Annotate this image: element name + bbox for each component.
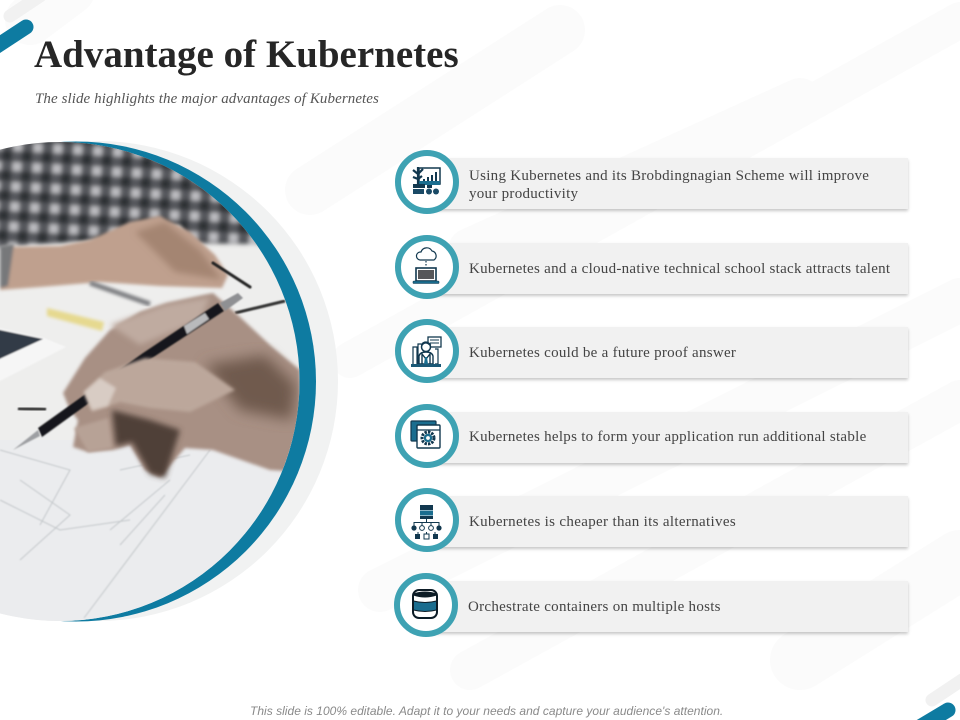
icon: cloud and laptop	[412, 247, 440, 284]
item 6: containers	[394, 573, 910, 637]
corner accent: top left	[0, 20, 34, 53]
item 3 text: Kubernetes could be a future proof answer	[469, 345, 736, 361]
item 4: stability	[395, 404, 910, 468]
icon: browser windows with gear	[410, 420, 441, 449]
subtitle: The slide highlights the major advantages of Kubernetes	[35, 91, 379, 107]
pen	[13, 293, 243, 450]
tablet	[0, 329, 62, 380]
icon: database cylinder	[412, 589, 438, 619]
icon: server network hierarchy	[411, 505, 442, 540]
item 5 text: Kubernetes is cheaper than its alternatives	[469, 514, 736, 530]
icon: person with speech bubble	[411, 336, 442, 367]
item 1: productivity	[395, 150, 910, 214]
item 2 text: Kubernetes and a cloud-native technical school stack attracts talent	[469, 261, 890, 277]
corner accent: bottom right	[916, 702, 956, 720]
lower hand	[63, 293, 300, 477]
footer note: This slide is 100% editable. Adapt it to your needs and capture your audience's attention.	[250, 704, 723, 718]
blueprint lines	[0, 450, 210, 618]
item 1 text	[469, 168, 869, 202]
thumb	[84, 358, 235, 412]
circular photo: hands drawing on blueprints	[0, 141, 338, 622]
item 3: future proof	[395, 319, 910, 383]
upper hand	[0, 216, 228, 290]
item 6 text: Orchestrate containers on multiple hosts	[468, 599, 721, 615]
shirt	[0, 142, 258, 250]
title: Advantage of Kubernetes	[34, 33, 459, 76]
item 4 text: Kubernetes helps to form your application run additional stable	[469, 429, 867, 445]
item 1 text: your productivity	[469, 186, 578, 202]
item 2: talent	[395, 235, 910, 299]
icon: monitor with chart and plant	[412, 167, 441, 194]
item 5: cost	[395, 488, 910, 552]
item 1 text: Using Kubernetes and its Brobdingnagian Scheme will improve	[469, 168, 869, 184]
